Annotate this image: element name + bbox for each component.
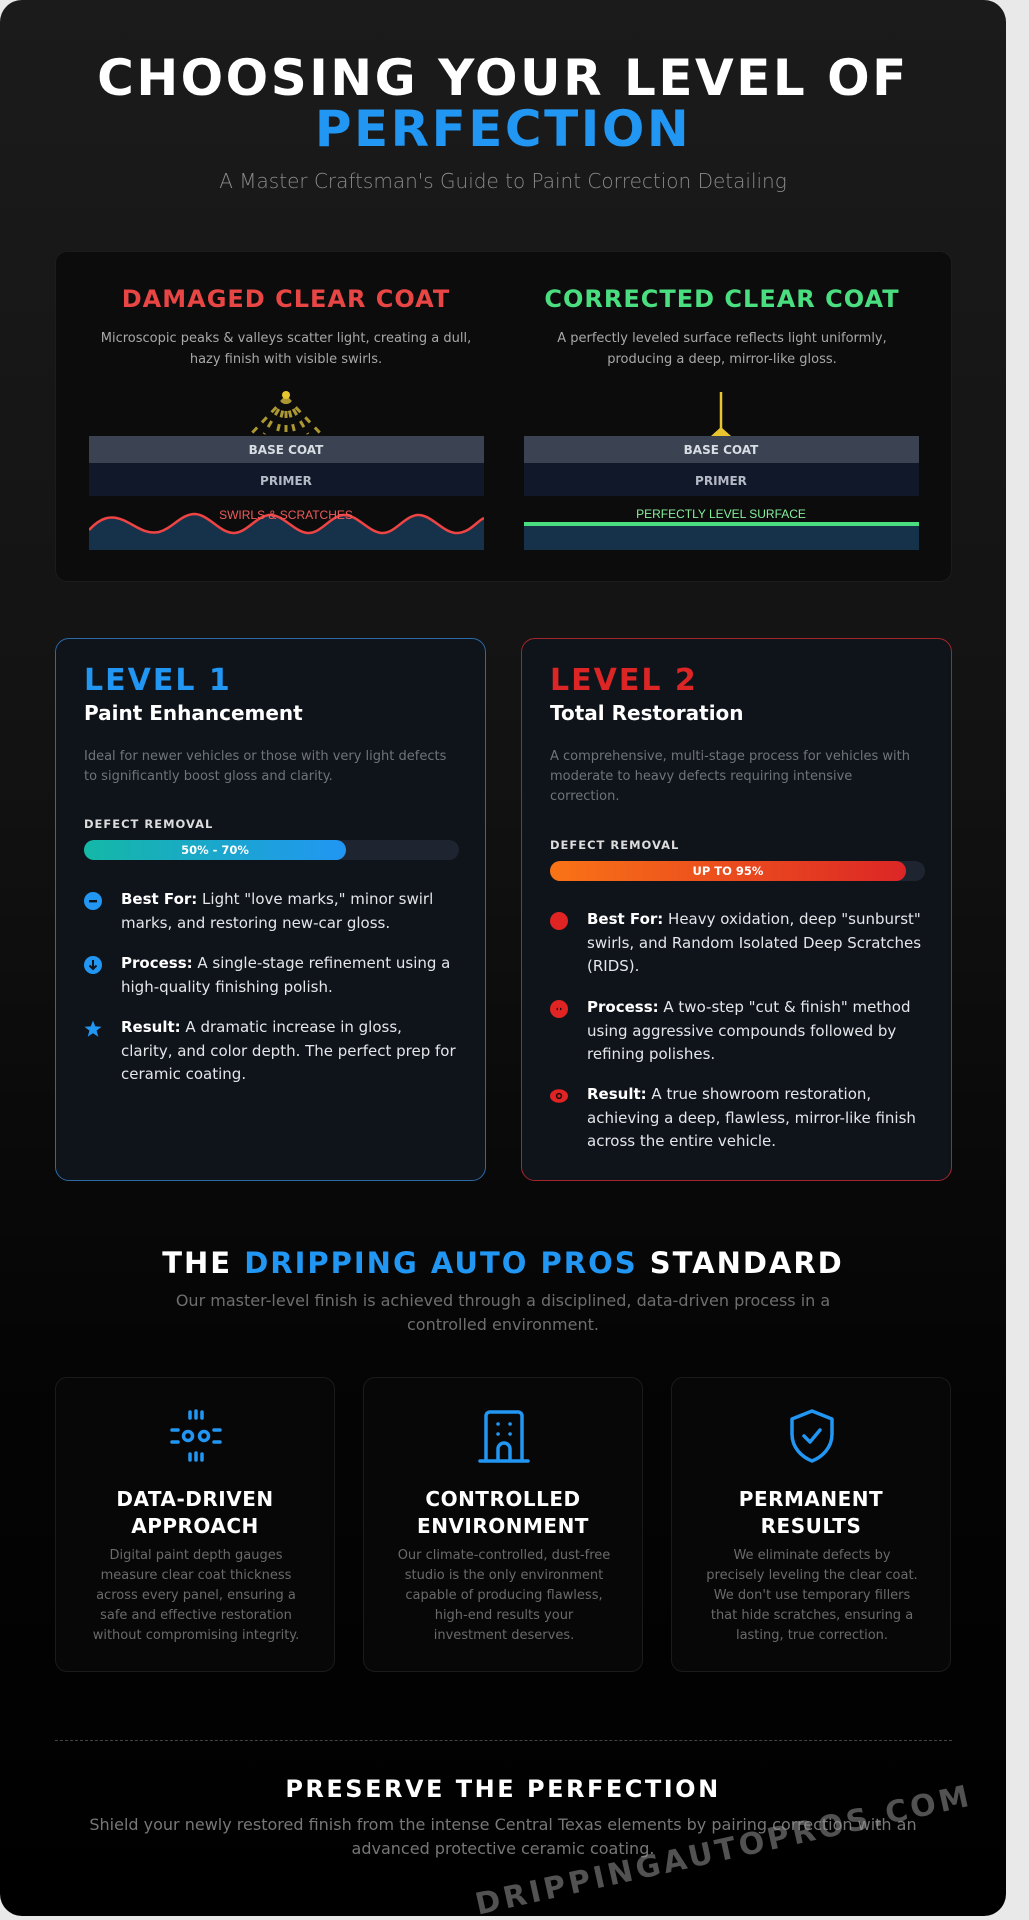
description: correction. [550, 789, 619, 804]
diagram: damaged layers: BASE COAT [249, 443, 324, 457]
diagram: damaged layers: PRIMER [260, 474, 312, 488]
panel: controlled environment: CONTROLLED [425, 1487, 581, 1511]
bar chart: 50-70% [84, 840, 459, 860]
bar chart: 50-70%: 50% - 70% [181, 843, 249, 857]
panel: data-driven [55, 1377, 335, 1672]
heading: level 1: LEVEL 1 [84, 663, 232, 698]
panel: level 1 [55, 638, 486, 1181]
text: standard intro: Our master-level finish is achieved through a disciplined, data-driven process in a controlled environment. [176, 1291, 830, 1334]
bullet: result: ceramic coating. [121, 1065, 246, 1083]
panel: permanent results: RESULTS [761, 1514, 861, 1538]
bullet: best for: Best For: Heavy oxidation, deep "sunburst" swirls, and Random Isolated Deep Scratches (RIDS). [587, 910, 921, 975]
text: damaged description [101, 331, 471, 367]
bullet: result [84, 1018, 456, 1083]
panel: controlled environment: ENVIRONMENT [417, 1514, 589, 1538]
heading: standard: THE DRIPPING AUTO PROS STANDARD [162, 1246, 844, 1280]
panel: permanent results: We eliminate defects by precisely leveling the clear coat. We don't use temporary fillers that hide scratches, ensuring a lasting, true correction. [706, 1548, 918, 1643]
label: defect removal: DEFECT REMOVAL [84, 817, 213, 831]
heading: preserve: PRESERVE THE PERFECTION [285, 1775, 721, 1803]
diagram: corrected layers: PRIMER [695, 474, 747, 488]
panel: data-driven: APPROACH [131, 1514, 259, 1538]
diagram: damaged layers: SWIRLS & SCRATCHES [219, 508, 353, 522]
bar chart: up to 95%: UP TO 95% [693, 864, 763, 878]
bullet: result: clarity, and color depth. The perfect prep for [121, 1042, 456, 1060]
description: to significantly boost gloss and clarity. [84, 769, 333, 784]
panel: clear coat comparison [55, 251, 952, 582]
text: damaged description: Microscopic peaks & valleys scatter light, creating a dull, [101, 331, 471, 346]
description: A comprehensive, multi-stage process for vehicles with [550, 749, 910, 764]
bullet: result: Result: A true showroom restoration, achieving a deep, flawless, mirror-like finish across the entire vehicle. [587, 1085, 916, 1150]
bullet: result: Result: A dramatic increase in gloss, [121, 1018, 402, 1036]
panel: permanent results: PERMANENT [739, 1487, 883, 1511]
description: Ideal for newer vehicles or those with very light defects [84, 749, 446, 764]
title [97, 49, 909, 158]
heading: damaged: DAMAGED CLEAR COAT [122, 285, 450, 313]
text: damaged description: hazy finish with visible swirls. [190, 352, 382, 367]
bullet: best for: Best For: Light "love marks," minor swirl marks, and restoring new-car gloss. [121, 890, 433, 932]
diagram: corrected layers: PERFECTLY LEVEL SURFACE [636, 507, 806, 521]
heading: level 2: LEVEL 2 [550, 663, 698, 698]
icon: shield check [790, 1409, 834, 1463]
icon: building [478, 1410, 530, 1463]
panel: permanent results [671, 1377, 951, 1672]
bullet: process: Process: A single-stage refinement using a high-quality finishing polish. [121, 954, 450, 996]
panel: data-driven: Digital paint depth gauges measure clear coat thickness across every panel, ensuring a safe and effective restoration without compromising integrity. [93, 1548, 299, 1643]
title: PERFECTION [315, 100, 691, 158]
subtitle: A Master Craftsman's Guide to Paint Correction Detailing [219, 169, 787, 193]
text: preserve: Shield your newly restored finish from the intense Central Texas elements by pairing correction with an advanced protective ceramic coating. [89, 1815, 917, 1858]
title: CHOOSING YOUR LEVEL OF [97, 49, 909, 107]
panel: level 2 [521, 638, 952, 1181]
subheading: Total Restoration [550, 701, 744, 725]
heading: corrected: CORRECTED CLEAR COAT [544, 285, 900, 313]
diagram: corrected layers [524, 392, 919, 550]
diagram: damaged layers [89, 391, 484, 550]
icon: gauge sensor [170, 1409, 222, 1462]
description [550, 749, 910, 804]
label: defect removal: DEFECT REMOVAL [550, 838, 679, 852]
bullet: process: Process: A two-step "cut & finish" method using aggressive compounds followed by refining polishes. [587, 998, 910, 1063]
diagram: corrected layers: BASE COAT [684, 443, 759, 457]
description: moderate to heavy defects requiring intensive [550, 769, 852, 784]
description [84, 749, 446, 784]
bar chart: up to 95% [550, 861, 925, 881]
panel: controlled environment [363, 1377, 643, 1672]
panel: controlled environment: Our climate-controlled, dust-free studio is the only environment capable of producing flawless, high-end results your investment deserves. [398, 1548, 610, 1643]
text: corrected description: A perfectly leveled surface reflects light uniformly, producing a deep, mirror-like gloss. [557, 331, 887, 367]
panel: data-driven: DATA-DRIVEN [116, 1487, 274, 1511]
subheading: Paint Enhancement [84, 701, 303, 725]
